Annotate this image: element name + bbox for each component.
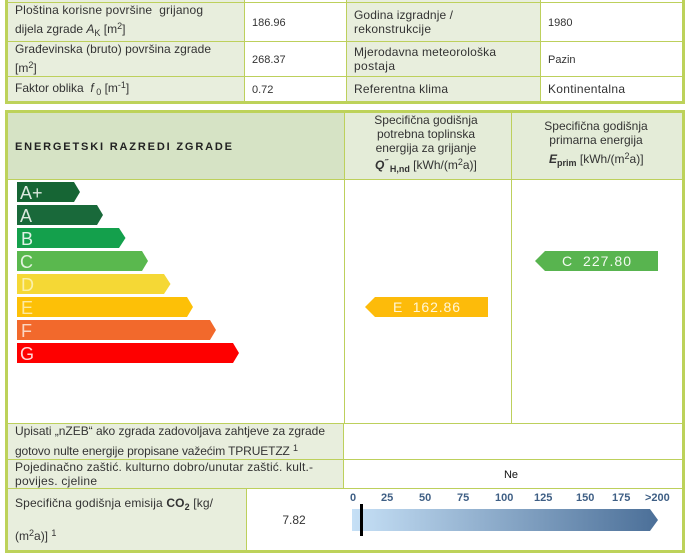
row: gross floor area: ] [33,61,37,75]
class A [17,205,103,226]
text: heritage protection: Pojedinačno zaštić. kulturno dobro/unutar zaštić. kult.- [15,460,313,474]
text: CO2 emission label [15,496,214,543]
class A: A [20,206,32,226]
row: weather station: postaja [354,59,395,73]
column heading: primary energy: Specifična godišnja [544,119,648,133]
column heading: heating energy: [kWh/(m [410,158,458,172]
row: year of construction: 1980 [548,17,572,29]
column heading: primary energy [544,119,648,168]
row: weather station: Mjerodavna meteorološka [354,45,496,59]
scale labels: 125 [534,492,552,504]
column heading: heating energy: Specifična godišnja [374,113,478,127]
class G [17,343,239,364]
text: nZEB note: gotovo nulte energije propisane važećim TPRUETZZ [15,444,290,458]
row: usable floor area: ] [122,22,125,36]
arrow: primary energy rating C 227.80: C 227.80 [562,253,631,269]
text: CO2 emission label: Specifična godišnja emisija CO [15,496,184,510]
row: gross floor area [15,42,286,75]
column heading: primary energy: a)] [630,152,644,166]
gradient arrow bar [352,509,658,531]
arrow: heating energy rating E 162.86: E 162.86 [393,299,460,315]
scale labels: 75 [457,492,469,504]
row: usable floor area: K [94,28,100,38]
column heading: heating energy [374,113,478,174]
chart: CO2 scale [350,492,670,536]
row: usable floor area: [m [100,22,117,36]
row: shape factor: 0.72 [252,84,273,96]
row: reference climate [354,82,625,96]
panel: building data table [6,0,684,102]
row: gross floor area: 268.37 [252,54,286,66]
scale labels: 100 [495,492,513,504]
scale labels [350,492,670,504]
row: usable floor area: 186.96 [252,17,286,29]
class F: F [21,321,32,341]
scale labels: 175 [612,492,630,504]
text: heritage protection: povijes. cjeline [15,474,97,488]
value: heritage protection: Ne [504,469,518,481]
class B [17,228,126,249]
class G: G [20,344,34,364]
column heading: heating energy: energija za grijanje [376,141,477,155]
column heading: heating energy: H,nd [387,164,410,174]
heading: energy classes: ENERGETSKI RAZREDI ZGRADE [15,141,232,153]
column heading: primary energy: 2 [625,151,630,161]
row: gross floor area: [m [15,61,28,75]
value marker [360,504,363,536]
column heading: primary energy: [kWh/(m [577,152,625,166]
row: gross floor area: 2 [28,60,33,70]
row: reference climate: Referentna klima [354,82,448,96]
text: CO2 emission label: 2 [185,502,190,512]
row: year of construction [354,8,572,36]
class A+ [17,182,80,203]
row: shape factor: 0 [94,87,101,97]
row: weather station [354,45,576,73]
class F [17,320,216,341]
value: CO2 emission: 7.82 [282,513,306,527]
arrow: heating energy rating E 162.86 [365,297,488,317]
column heading: heating energy: Q [375,158,384,172]
scale labels: 150 [576,492,594,504]
row: reference climate: Kontinentalna [548,82,625,96]
scale labels: 0 [350,492,356,504]
class C: C [20,252,33,272]
text: nZEB note: Upisati „nZEB“ ako zgrada zadovoljava zahtjeve za zgrade [15,424,325,438]
column heading: heating energy: a)] [463,158,477,172]
row: shape factor: [m [101,81,118,95]
text: CO2 emission label: 2 [29,528,34,538]
class A+: A+ [20,183,43,203]
scale labels: 50 [419,492,431,504]
text: CO2 emission label: [kg/ [190,496,214,510]
text: CO2 emission label: (m [15,529,29,543]
text: nZEB note [15,424,325,458]
arrow: primary energy rating C 227.80 [535,251,658,271]
class B: B [21,229,33,249]
row: year of construction: Godina izgradnje / [354,8,454,22]
text: CO2 emission label: 1 [51,528,56,538]
row: shape factor: Faktor oblika f [15,81,94,95]
column heading: heating energy: ˝ [384,158,389,168]
row: weather station: Pazin [548,54,576,66]
row: shape factor: -1 [118,80,126,90]
column heading: primary energy: E [549,152,557,166]
row: usable floor area: 2 [117,21,122,31]
class C [17,251,148,272]
column heading: heating energy: 2 [458,157,463,167]
class E: E [21,298,33,318]
column heading: primary energy: primarna energija [549,133,643,147]
scale labels: >200 [645,492,670,504]
column heading: primary energy: prim [557,158,577,168]
class E [17,297,193,318]
scale labels: 25 [381,492,393,504]
row: shape factor: ] [126,81,129,95]
row: usable floor area [15,3,286,38]
class D: D [21,275,34,295]
row: shape factor [15,80,273,97]
text: CO2 emission label: a)] [34,529,51,543]
column heading: heating energy: potrebna toplinska [377,127,475,141]
row: usable floor area: Ploština korisne površine grijanog [15,3,203,17]
row: usable floor area: dijela zgrade A [15,22,94,36]
panel: energy classes [6,112,684,552]
text: heritage protection [15,460,313,488]
row: gross floor area: Građevinska (bruto) površina zgrade [15,42,211,56]
row: year of construction: rekonstrukcije [354,22,431,36]
energy class scale [17,182,239,364]
class D [17,274,170,295]
text: nZEB note: 1 [293,443,298,453]
